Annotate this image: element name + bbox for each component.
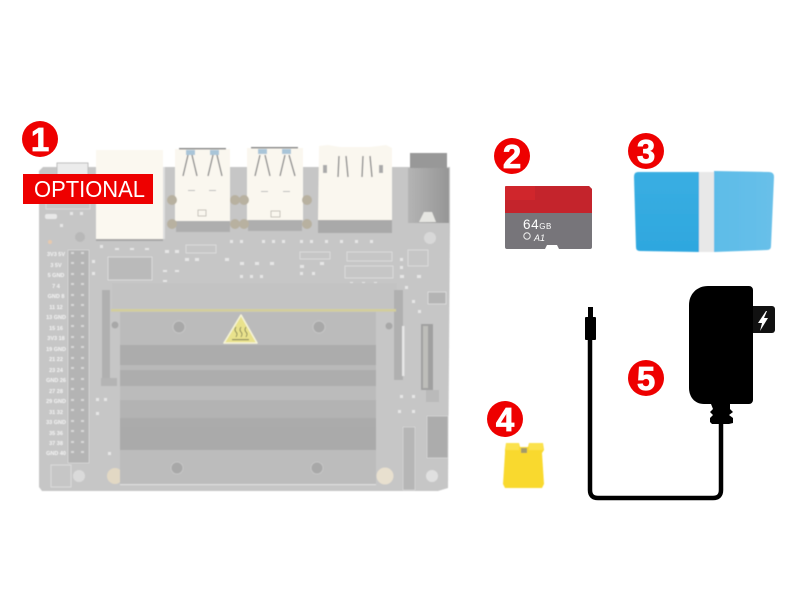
GPIO pin labels: 35 36	[49, 431, 63, 437]
barrel jack	[408, 153, 449, 223]
icon: yellow jumper	[503, 443, 544, 488]
USB port 2	[247, 147, 303, 231]
GPIO pin labels: 21 22	[49, 357, 63, 363]
GPIO pin labels: 33 GND	[46, 420, 66, 426]
badge: number 1	[22, 121, 58, 158]
icon: micro SD card	[505, 186, 592, 249]
lightning symbol	[758, 311, 768, 331]
badge: number 1: 1	[31, 121, 49, 158]
GPIO pin labels: 3V3 18	[47, 336, 65, 342]
icon: micro SD card: A1	[533, 233, 545, 243]
GPIO pin labels: 37 38	[49, 441, 63, 447]
GPIO pin labels: 3 5V	[50, 263, 62, 269]
GPIO pin labels: 3V3 5V	[47, 252, 65, 258]
GPIO pin labels: GND 26	[46, 378, 66, 384]
GPIO pin header	[68, 250, 89, 463]
status LED	[45, 214, 57, 219]
panel: faded carrier board	[39, 145, 450, 491]
badge: number 5: 5	[637, 360, 655, 397]
badge: number 4	[487, 401, 523, 438]
icon: hot surface warning	[224, 315, 257, 343]
DC plug	[585, 317, 596, 340]
GPIO pin labels: 29 GND	[46, 399, 66, 405]
icon: power adapter with cable	[585, 286, 775, 498]
GPIO pin labels: 19 GND	[46, 347, 66, 353]
label: optional: OPTIONAL	[34, 176, 145, 202]
silkscreen parts	[46, 202, 446, 487]
adapter prong	[753, 306, 775, 333]
micro USB connector	[57, 163, 88, 175]
badge: number 2	[494, 138, 530, 175]
GPIO pin labels: GND 8	[48, 294, 64, 300]
capacitors	[167, 195, 312, 229]
module side latches	[101, 290, 404, 386]
cable	[590, 340, 721, 498]
gold connector strip	[111, 309, 396, 312]
badge: number 2: 2	[503, 138, 521, 175]
LED marker	[48, 240, 52, 244]
compute module	[112, 283, 397, 310]
USB port 1	[175, 148, 230, 232]
heatsink	[120, 312, 376, 485]
GPIO pin labels: 5 GND	[48, 273, 64, 279]
adapter body	[689, 286, 753, 404]
GPIO pin labels	[46, 252, 66, 457]
badge: number 5	[628, 360, 664, 397]
GPIO pin labels: GND 40	[46, 451, 66, 457]
GPIO pin labels: 23 24	[49, 368, 64, 374]
ethernet port	[96, 150, 165, 241]
mounting holes	[73, 232, 438, 484]
GPIO pin labels: 7 4	[52, 284, 61, 290]
display port	[318, 145, 392, 233]
badge: number 3	[628, 133, 664, 170]
GPIO pin labels: 13 GND	[46, 315, 66, 321]
right headers	[403, 416, 448, 490]
GPIO pin labels: 15 16	[49, 326, 63, 332]
badge: number 3: 3	[637, 133, 655, 170]
small components	[60, 212, 421, 455]
GPIO pin labels: 11 12	[49, 305, 63, 311]
strain relief	[710, 404, 733, 424]
icon: micro SD card: 64GB	[523, 217, 552, 232]
icon: blue USB card reader	[634, 171, 774, 252]
heatsink screw holes	[111, 321, 393, 474]
badge: number 4: 4	[496, 401, 515, 438]
FPC connector	[421, 324, 439, 402]
GPIO pin labels: 31 32	[49, 410, 63, 416]
GPIO pin labels: 27 28	[49, 389, 63, 395]
board base	[39, 167, 450, 491]
